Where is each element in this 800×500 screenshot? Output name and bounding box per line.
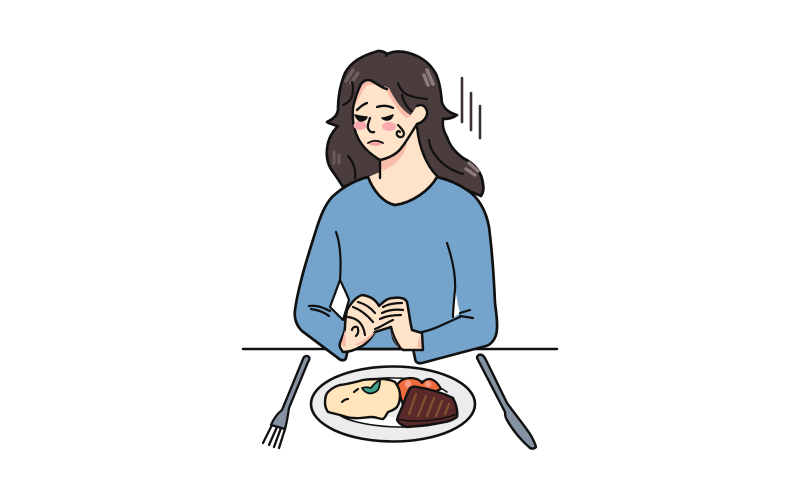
herb leaf [362, 380, 380, 393]
eyebrows [357, 103, 393, 110]
tomatoes [397, 378, 441, 405]
eyes [355, 115, 393, 121]
hair silhouette [327, 51, 483, 196]
arm gap left [330, 280, 349, 320]
arm gap right [453, 287, 460, 318]
mouth [368, 141, 383, 146]
finger lines [348, 302, 403, 349]
sleeve folds [309, 232, 473, 332]
gravy marks [342, 389, 358, 402]
knife [477, 355, 536, 449]
blush [354, 121, 366, 130]
nose [368, 118, 374, 132]
face outline [353, 80, 427, 160]
fork [263, 356, 309, 448]
tear [397, 125, 404, 137]
hair strands [343, 54, 463, 178]
table edge [243, 348, 557, 350]
face [353, 80, 427, 160]
plate [311, 366, 475, 442]
plate with food [311, 366, 475, 442]
forehead shadow [354, 81, 412, 118]
mashed potato [325, 379, 400, 419]
steak [397, 387, 457, 427]
palm shadow [341, 327, 421, 348]
woman [295, 51, 497, 363]
sweater [295, 177, 497, 363]
hands [340, 295, 423, 352]
hair highlights [346, 70, 358, 83]
plate well [335, 378, 447, 427]
neck [368, 125, 437, 205]
motion lines: gloom [462, 78, 480, 138]
